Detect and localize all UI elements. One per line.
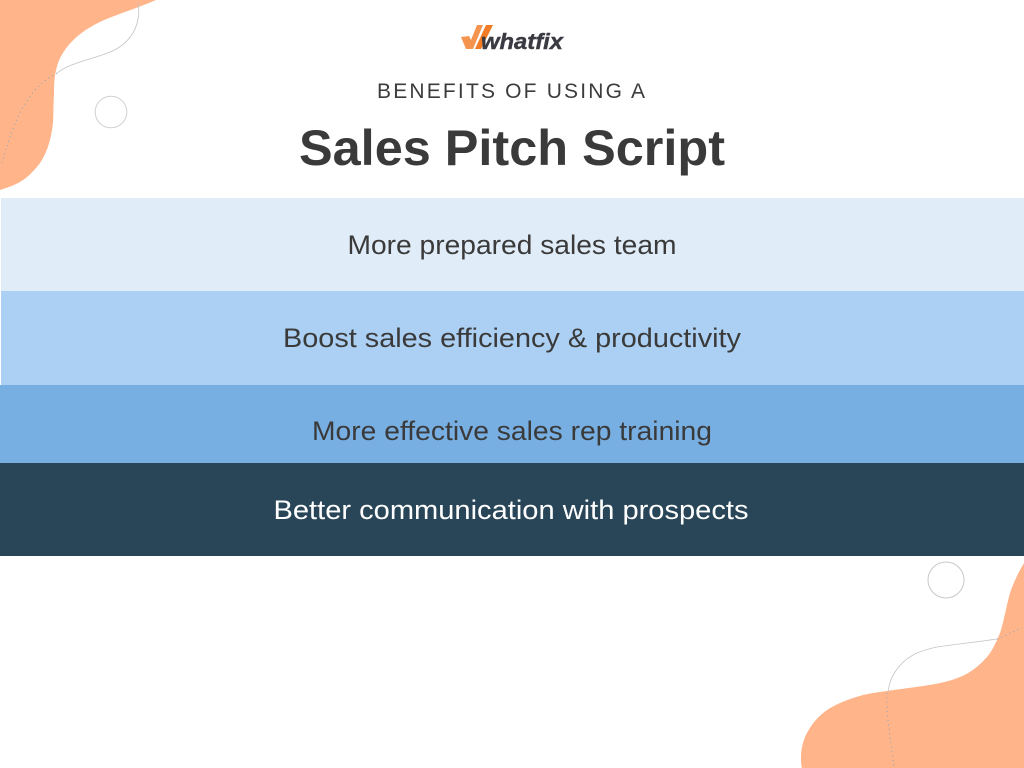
decoration: bottom-right blob [801, 563, 1024, 768]
title: Sales Pitch Script [299, 120, 725, 176]
band 4: Better communication with prospects: Better communication with prospects [274, 495, 748, 525]
band 2: Boost sales efficiency & productivity [1, 291, 1024, 385]
subtitle: BENEFITS OF USING A [377, 80, 645, 103]
band 2: Boost sales efficiency & productivity: Boost sales efficiency & productivity [283, 323, 742, 353]
logo wordmark: whatfix [481, 29, 564, 54]
band 1: More prepared sales team [1, 198, 1024, 291]
icon: hatched chevron [461, 25, 483, 49]
decoration: top-left blob [0, 0, 156, 190]
band 1: More prepared sales team: More prepared sales team [348, 230, 676, 260]
decoration: top-left circle [95, 96, 127, 128]
band 3: More effective sales rep training [0, 385, 1024, 463]
band 3: More effective sales rep training: More effective sales rep training [312, 416, 712, 446]
decoration: bottom-right circle [928, 562, 964, 598]
icon: solid slash [475, 25, 493, 49]
band 4: Better communication with prospects [0, 463, 1024, 556]
logo: whatfix [461, 25, 564, 54]
